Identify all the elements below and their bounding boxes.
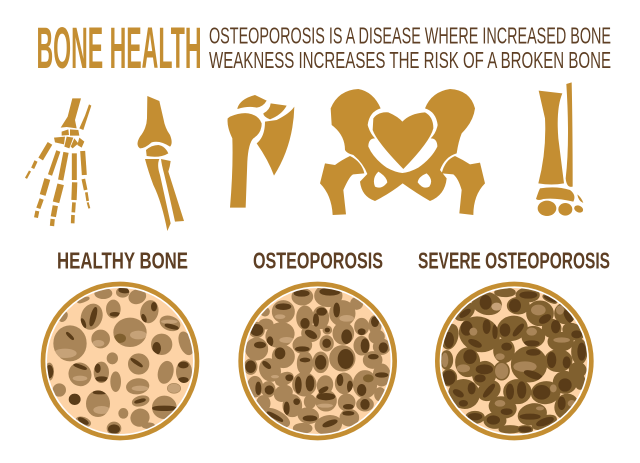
text: BONE HEALTH <box>36 16 202 81</box>
icon: ankle bones <box>536 82 584 216</box>
icon: shoulder bones <box>228 95 294 208</box>
panel: severe osteoporosis circle <box>432 282 595 442</box>
icon: pelvis and hip bones <box>320 89 485 215</box>
icon: hand and wrist bones <box>26 98 91 226</box>
icon: knee bones <box>137 96 184 231</box>
heading: osteoporosis: OSTEOPOROSIS <box>253 248 383 274</box>
panel: osteoporosis circle <box>237 282 400 442</box>
heading: healthy bone: HEALTHY BONE <box>57 248 188 274</box>
panel: healthy bone circle <box>40 282 200 442</box>
description text <box>209 22 611 73</box>
